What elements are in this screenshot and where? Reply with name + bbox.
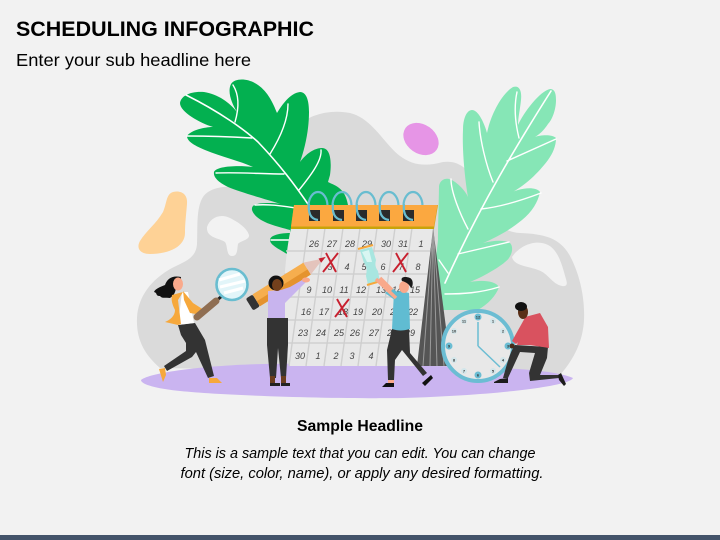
calendar dates: 29 xyxy=(404,328,415,338)
sample headline: Sample Headline xyxy=(297,418,423,435)
calendar grid xyxy=(283,228,430,366)
calendar dates: 9 xyxy=(306,285,312,295)
footer bar xyxy=(0,535,720,540)
subtitle: Enter your sub headline here xyxy=(16,50,251,70)
head xyxy=(173,278,183,290)
clock xyxy=(443,311,513,381)
background grey blob xyxy=(137,112,584,375)
person: kneeling man xyxy=(494,302,566,386)
body text: This is a sample text that you can edit. You can change xyxy=(184,446,536,462)
magnifier xyxy=(197,269,248,317)
calendar dates: 4 xyxy=(344,262,350,272)
clock: 7 xyxy=(463,368,466,374)
clock: 3 xyxy=(507,344,510,348)
calendar dates: 1 xyxy=(315,351,321,361)
red cross marks xyxy=(323,253,408,317)
dark green leaf xyxy=(180,80,348,262)
hair xyxy=(154,276,181,298)
calendar xyxy=(283,192,451,366)
ankle xyxy=(388,380,394,383)
calendar dates: 10 xyxy=(322,285,332,295)
calendar dates: 18 xyxy=(338,307,348,317)
calendar dates: 27 xyxy=(326,239,338,249)
calendar header xyxy=(291,205,438,229)
calendar page xyxy=(283,228,433,366)
calendar dates: 28 xyxy=(386,328,397,338)
light green leaf xyxy=(430,87,556,310)
calendar pyramid stand xyxy=(416,228,451,366)
jacket xyxy=(165,292,183,325)
calendar dates: 25 xyxy=(333,328,345,338)
calendar dates: 14 xyxy=(392,285,402,295)
blob: peach xyxy=(138,192,187,254)
shoes xyxy=(382,375,433,387)
calendar dates: 4 xyxy=(368,351,374,361)
clock: 1 xyxy=(492,318,495,324)
calendar dates: 27 xyxy=(368,328,380,338)
calendar dates: 23 xyxy=(297,328,308,338)
calendar dates: 21 xyxy=(389,307,400,317)
body text: font (size, color, name), or apply any desired formatting. xyxy=(180,466,544,482)
hair xyxy=(515,302,527,311)
shoes xyxy=(159,368,222,383)
calendar dates: 1 xyxy=(418,239,424,249)
blob: pink xyxy=(397,116,445,162)
calendar dates: 6 xyxy=(380,262,386,272)
calendar dates xyxy=(295,239,424,361)
person: man with hourglass xyxy=(376,277,433,387)
clock: 8 xyxy=(453,358,456,362)
calendar dates: 22 xyxy=(407,307,418,317)
clock: 9 xyxy=(448,344,451,348)
clock: 10 xyxy=(452,328,457,334)
clock hands xyxy=(478,322,500,367)
hand xyxy=(510,344,514,348)
trousers xyxy=(387,329,427,380)
clock: 5 xyxy=(492,368,495,374)
head xyxy=(518,305,528,319)
calendar dates: 26 xyxy=(308,239,319,249)
calendar dates: 20 xyxy=(371,307,382,317)
clock: 11 xyxy=(462,318,467,324)
clock: 12 xyxy=(476,314,481,320)
clock: 4 xyxy=(502,358,505,362)
clock numerals xyxy=(446,314,512,378)
calendar dates: 3 xyxy=(349,351,355,361)
shoes xyxy=(494,373,566,386)
arm xyxy=(376,278,396,298)
illustration: scheduling scene xyxy=(137,80,584,398)
title: SCHEDULING INFOGRAPHIC xyxy=(16,17,314,41)
calendar rings back xyxy=(308,192,422,220)
calendar dates: 29 xyxy=(361,239,372,249)
calendar dates: 2 xyxy=(332,351,339,361)
shoes xyxy=(270,383,290,386)
calendar dates: 3 xyxy=(327,262,333,272)
calendar dates: 15 xyxy=(410,285,421,295)
body text xyxy=(180,446,544,482)
calendar dates: 5 xyxy=(361,262,367,272)
shirt xyxy=(268,279,306,318)
calendar dates: 8 xyxy=(415,262,421,272)
calendar dates: 24 xyxy=(315,328,326,338)
calendar dates: 30 xyxy=(381,239,391,249)
hourglass xyxy=(358,245,381,285)
calendar dates: 28 xyxy=(344,239,355,249)
trousers xyxy=(503,345,559,381)
ankles xyxy=(270,376,275,383)
calendar dates: 19 xyxy=(353,307,363,317)
clock: 6 xyxy=(477,372,480,378)
calendar dates: 26 xyxy=(349,328,360,338)
calendar dates: 17 xyxy=(319,307,330,317)
person: woman with pencil xyxy=(267,276,310,386)
calendar dates: 11 xyxy=(339,285,349,295)
hand xyxy=(302,278,310,282)
head xyxy=(268,276,284,290)
head xyxy=(399,281,409,293)
calendar dates: 13 xyxy=(376,285,386,295)
shirt xyxy=(178,292,194,325)
pencil xyxy=(246,251,329,311)
calendar dates: 31 xyxy=(398,239,408,249)
calendar dates: 12 xyxy=(356,285,366,295)
clock: 2 xyxy=(502,328,505,334)
calendar dates: 16 xyxy=(301,307,311,317)
shirt xyxy=(517,313,549,348)
calendar dates: 7 xyxy=(398,262,404,272)
legs xyxy=(267,318,288,378)
shirt xyxy=(392,291,410,330)
calendar holes and front rings xyxy=(309,204,414,221)
person: woman with magnifier xyxy=(154,269,248,383)
calendar dates: 30 xyxy=(295,351,305,361)
trousers xyxy=(164,323,214,378)
hair xyxy=(402,277,413,288)
ground ellipse xyxy=(141,364,573,398)
